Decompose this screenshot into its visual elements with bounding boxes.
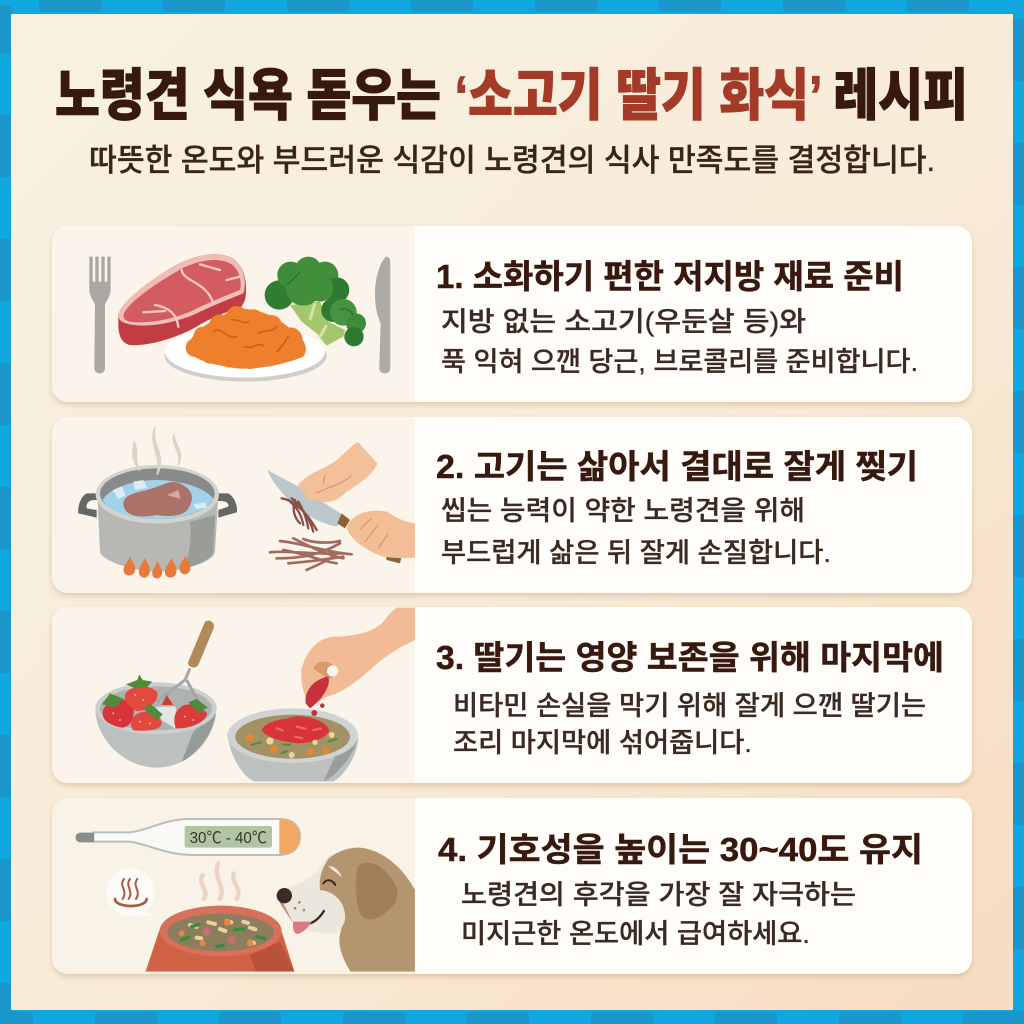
panel: step 4 serving temperature [52, 798, 972, 974]
illustration: thermometer, steam bubble, food bowl, dog [75, 819, 415, 973]
illustration: fork, steak, carrot plate, broccoli, knife [89, 254, 390, 382]
panel: step 3 adding strawberries [52, 607, 972, 783]
step 1 text line 2: 푹 익혀 으깬 당근, 브로콜리를 준비합니다. [441, 347, 918, 377]
step 2 heading: 2. 고기는 삶아서 결대로 잘게 찢기 [436, 448, 918, 485]
illustration: strawberry bowl, masher, soup bowl, hand [95, 608, 415, 782]
step 4 heading: 4. 기호성을 높이는 30~40도 유지 [438, 831, 923, 868]
subtitle: 따뜻한 온도와 부드러운 식감이 노령견의 식사 만족도를 결정합니다. [89, 143, 935, 178]
step 3 text line 2: 조리 마지막에 섞어줍니다. [453, 728, 752, 758]
panel: step 2 boiling and shredding [52, 417, 972, 593]
title: 노령견 식욕 돋우는 ‘소고기 딸기 화식’ 레시피 [55, 64, 968, 127]
illustration: thermometer, steam bubble, food bowl, dog: 30℃ - 40℃ [190, 830, 267, 847]
illustration: boiling pot and hands shredding meat [78, 428, 415, 578]
step 1 text line 1: 지방 없는 소고기(우둔살 등)와 [441, 307, 806, 337]
step 2 text line 2: 부드럽게 삶은 뒤 잘게 손질합니다. [441, 538, 831, 568]
panel: step 1 ingredients [52, 226, 972, 402]
step 4 text line 2: 미지근한 온도에서 급여하세요. [461, 919, 810, 949]
step 1 heading: 1. 소화하기 편한 저지방 재료 준비 [436, 258, 904, 295]
step 3 text line 1: 비타민 손실을 막기 위해 잘게 으깬 딸기는 [453, 691, 926, 721]
step 2 text line 1: 씹는 능력이 약한 노령견을 위해 [441, 496, 805, 526]
step 4 text line 1: 노령견의 후각을 가장 잘 자극하는 [461, 880, 856, 910]
step 3 heading: 3. 딸기는 영양 보존을 위해 마지막에 [436, 639, 944, 676]
